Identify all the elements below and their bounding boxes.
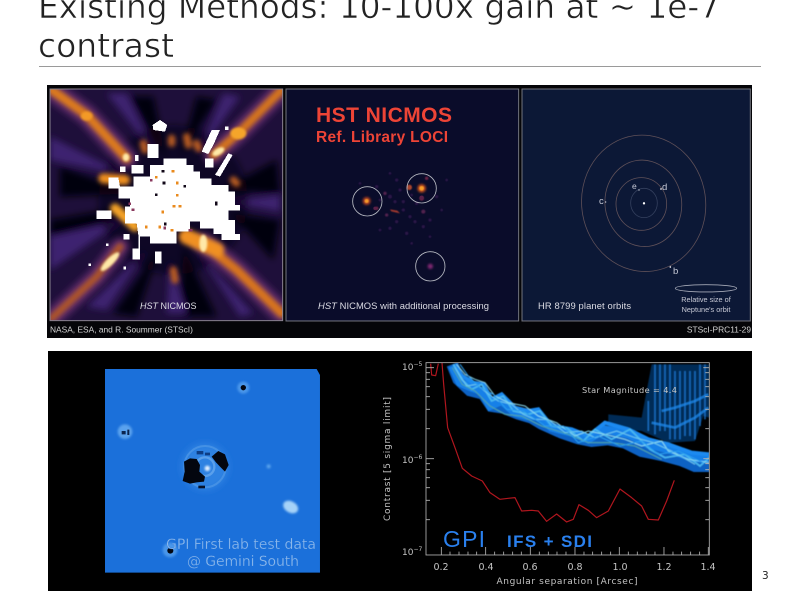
panel: HR 8799 orbit diagram xyxy=(522,89,750,321)
y-axis tick labels: 10 xyxy=(402,548,413,558)
panel label: processed image: HST NICMOS with additional processing xyxy=(318,300,489,311)
Neptune orbit ellipse xyxy=(675,285,737,292)
orbit ellipses xyxy=(573,127,715,280)
caption: GPI First lab test data xyxy=(166,537,316,570)
y-axis tick labels: −7 xyxy=(413,546,422,553)
caption: GPI First lab test data: @ Gemini South xyxy=(187,554,299,570)
planet dots xyxy=(605,188,671,268)
white saturated core xyxy=(88,120,240,269)
speckle residuals xyxy=(359,172,448,245)
planet c xyxy=(353,187,382,216)
y-axis tick labels: 10 xyxy=(402,363,413,373)
orbit labels: e xyxy=(632,181,637,191)
orbit labels: b xyxy=(673,266,678,277)
panel: processed image with three planets xyxy=(286,89,519,321)
orbit labels: d xyxy=(662,182,667,193)
red heading: HST NICMOS: HST NICMOS xyxy=(316,104,452,127)
y-axis tick labels xyxy=(402,361,422,558)
label: IFS + SDI: IFS + SDI xyxy=(507,532,592,551)
orbit labels: c xyxy=(599,196,604,207)
lower left speck xyxy=(163,543,177,557)
x-axis tick labels xyxy=(433,562,716,573)
title xyxy=(38,0,720,65)
credit: NASA, ESA, and R. Soummer: NASA, ESA, and R. Soummer (STScI) xyxy=(50,324,193,334)
lower right speck xyxy=(267,464,300,516)
x-axis tick labels: 1.0 xyxy=(612,562,628,573)
Neptune caption: Neptune's orbit xyxy=(682,305,730,314)
left speck xyxy=(118,424,132,439)
red subheading: Ref. Library LOCI: Ref. Library LOCI xyxy=(316,129,448,146)
label: GPI: GPI xyxy=(443,526,485,552)
x-axis title: Angular separation [Arcsec] xyxy=(496,577,638,587)
image panel: GPI results xyxy=(48,351,752,591)
y-axis tick labels: −5 xyxy=(413,361,422,368)
panel: GPI lab test image xyxy=(105,369,320,573)
star xyxy=(643,202,645,204)
title: contrast xyxy=(38,27,174,65)
planet b xyxy=(416,252,445,281)
star magnitude note: Star Magnitude = 4.4 xyxy=(582,385,677,395)
axes and ticks xyxy=(426,363,709,555)
Neptune caption xyxy=(681,295,732,314)
orbit labels xyxy=(599,181,678,277)
x-axis tick labels: 1.4 xyxy=(700,562,716,573)
Neptune caption: Relative size of xyxy=(681,295,732,304)
x-axis tick labels: 0.2 xyxy=(433,562,449,573)
y-axis tick labels: 10 xyxy=(402,456,413,466)
blue contrast curves xyxy=(452,364,709,466)
red GPI curve xyxy=(431,363,674,522)
panel label: HR 8799 planet orbits: HR 8799 planet orbits xyxy=(538,300,631,311)
top speck xyxy=(237,382,249,394)
central star and speckles xyxy=(182,443,229,490)
panel: raw HST NICMOS speckle image xyxy=(50,89,283,321)
image panel: HST NICMOS composite xyxy=(47,85,752,338)
x-axis tick labels: 0.8 xyxy=(567,562,583,573)
page number: 3 xyxy=(762,570,769,582)
panel label: HST NICMOS: HST NICMOS xyxy=(140,301,197,311)
x-axis tick labels: 0.4 xyxy=(478,562,494,573)
y-axis tick labels: −6 xyxy=(413,454,422,461)
x-axis tick labels: 1.2 xyxy=(656,562,672,573)
chart: contrast vs angular separation xyxy=(426,363,709,555)
caption: GPI First lab test data: GPI First lab test data xyxy=(166,537,316,553)
x-axis tick labels: 0.6 xyxy=(522,562,538,573)
credit: STScI-PRC11-29: STScI-PRC11-29 xyxy=(687,324,751,334)
planet d xyxy=(407,174,436,203)
y-axis title: Contrast [5 sigma limit] xyxy=(383,397,393,521)
